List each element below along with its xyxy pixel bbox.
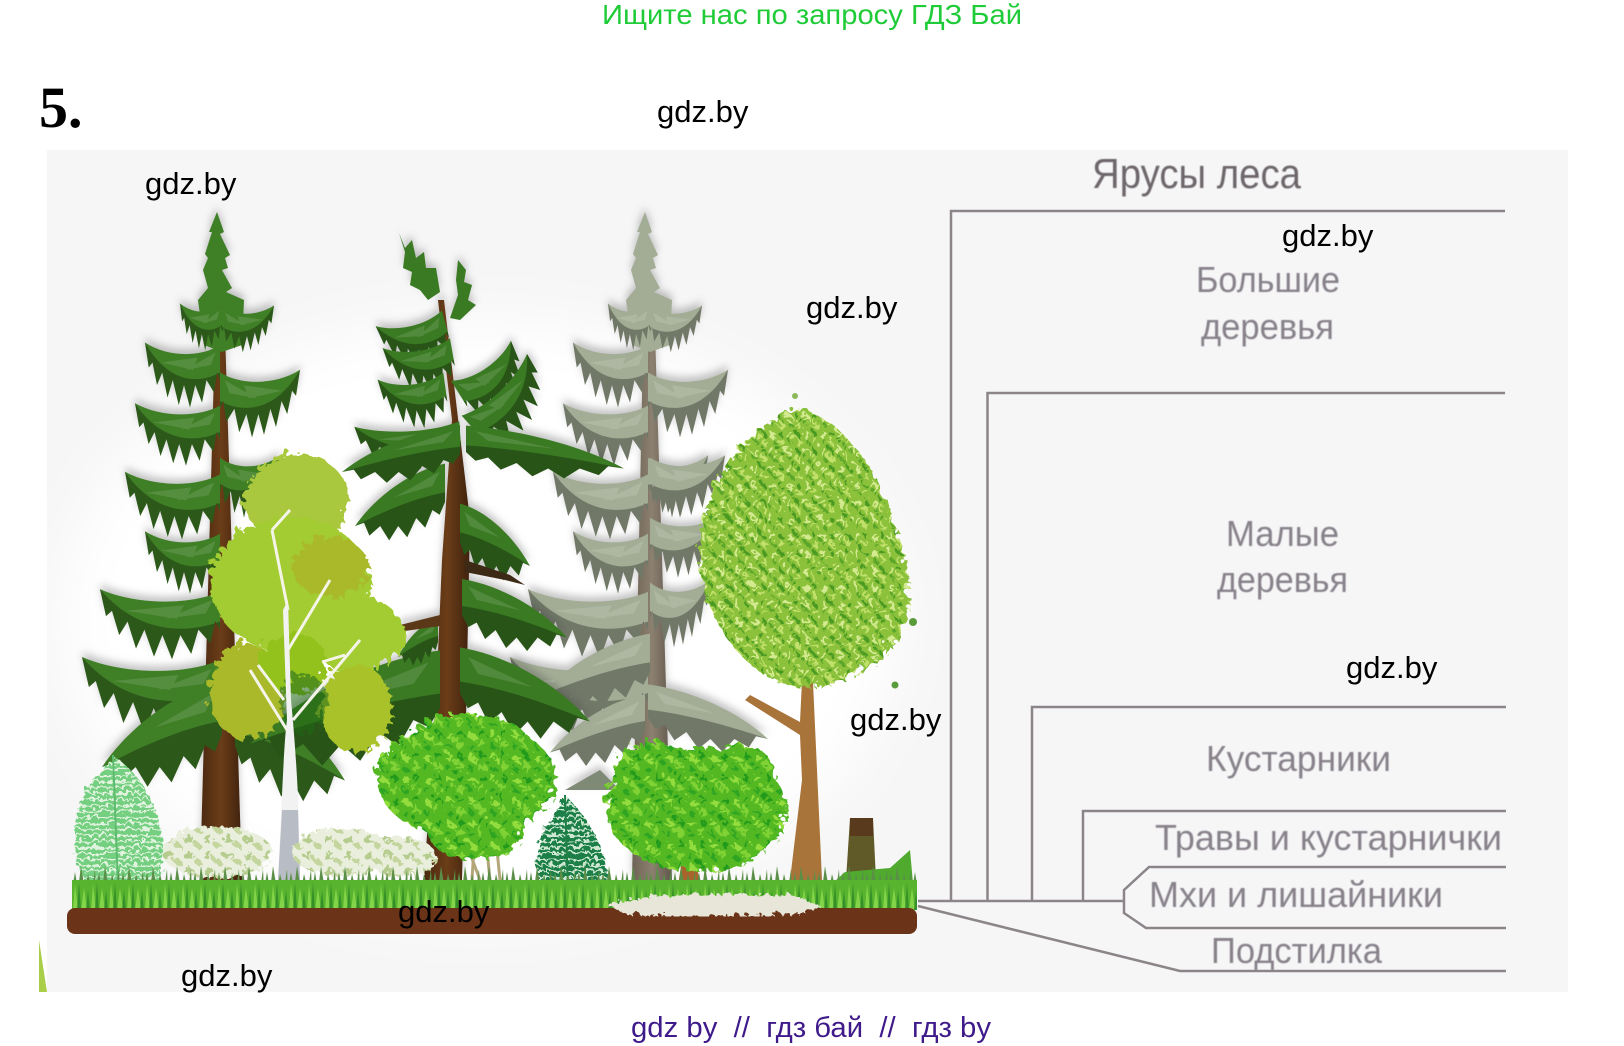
diagram: layer brackets <box>918 211 1506 971</box>
birch tree <box>205 449 400 880</box>
ground-level plants <box>160 824 434 876</box>
connector <box>918 900 1123 902</box>
bottom caption: gdz by // гдз бай // гдз by <box>631 1012 991 1044</box>
bracket: herbs <box>1083 811 1506 900</box>
bracket: large trees <box>951 211 1505 900</box>
watermarks <box>145 94 1438 993</box>
label: herbs and dwarf shrubs: Травы и кустарнички <box>1155 817 1502 858</box>
spruce tree left <box>82 212 345 880</box>
label: large trees <box>1196 259 1340 347</box>
label: large trees: деревья <box>1201 306 1334 347</box>
watermarks: gdz.by <box>398 894 490 929</box>
bush left <box>372 710 552 880</box>
label: shrubs: Кустарники <box>1206 738 1391 779</box>
label: small trees: деревья <box>1217 559 1348 600</box>
heading: forest layers: Ярусы леса <box>1092 150 1302 197</box>
watermarks: gdz.by <box>850 702 942 737</box>
fern left <box>72 755 161 885</box>
spruce tree grey <box>510 212 768 880</box>
watermarks: gdz.by <box>1282 218 1374 253</box>
label: small trees <box>1217 513 1348 600</box>
grass <box>72 866 917 910</box>
bracket: mosses <box>1124 867 1506 928</box>
label: large trees: Большие <box>1196 259 1340 300</box>
watermarks: gdz.by <box>145 166 237 201</box>
watermarks: gdz.by <box>657 94 749 129</box>
bracket: small trees <box>988 393 1505 900</box>
bracket: shrubs <box>1032 707 1506 900</box>
fern middle <box>534 795 604 895</box>
soil <box>67 908 917 934</box>
stump <box>825 818 915 905</box>
watermarks: gdz.by <box>181 958 273 993</box>
label: litter: Подстилка <box>1211 930 1383 971</box>
round tree <box>695 393 917 880</box>
illustration: forest <box>67 212 917 934</box>
watermarks: gdz.by <box>806 290 898 325</box>
task number: 5. <box>39 75 82 140</box>
panel: forest layers background <box>39 150 1568 992</box>
label: mosses and lichens: Мхи и лишайники <box>1149 874 1443 915</box>
watermarks: gdz.by <box>1346 650 1438 685</box>
label: small trees: Малые <box>1226 513 1339 554</box>
spruce tree middle <box>250 233 624 880</box>
litter patch <box>604 892 818 914</box>
bush right <box>602 738 782 885</box>
bracket: litter <box>918 906 1506 971</box>
